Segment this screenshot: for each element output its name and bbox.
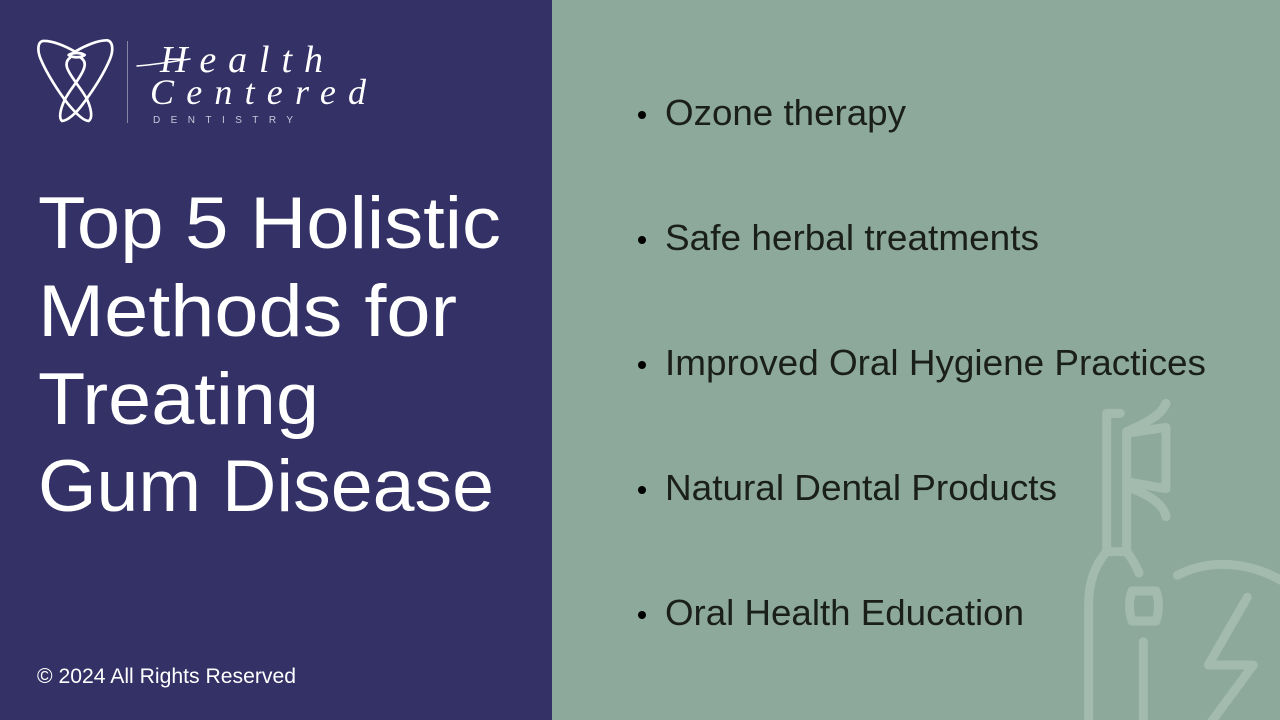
title: [38, 183, 501, 527]
logo divider: [127, 41, 128, 123]
logo wordmark: Dentistry: DENTISTRY: [153, 115, 293, 126]
list: holistic methods: [638, 92, 1206, 633]
title: Gum Disease: [38, 446, 494, 527]
title: Treating: [38, 359, 319, 440]
list item: Safe herbal treatments: Safe herbal treatments: [665, 217, 1039, 258]
list item: Improved Oral Hygiene Practices: Improved Oral Hygiene Practices: [665, 342, 1206, 383]
logo: Health Centered Dentistry: [38, 39, 367, 126]
copyright footer: © 2024 All Rights Reserved: [37, 665, 296, 688]
title: Methods for: [38, 271, 457, 352]
list item: Natural Dental Products: Natural Dental Products: [665, 467, 1057, 508]
logo wordmark: Centered: Centered: [150, 72, 367, 112]
panel: right background: [552, 0, 1280, 720]
icon: electric toothbrush watermark: [1089, 403, 1280, 720]
title: Top 5 Holistic: [38, 183, 501, 264]
panel: left navy background: [0, 0, 552, 720]
logo wordmark: Health: Health: [159, 39, 323, 81]
logo swash: H crossbar: [137, 59, 190, 66]
icon: tooth and ribbon logo mark: [38, 40, 112, 121]
list item: Oral Health Education: Oral Health Education: [665, 592, 1024, 633]
list item: Ozone therapy: Ozone therapy: [665, 92, 906, 133]
